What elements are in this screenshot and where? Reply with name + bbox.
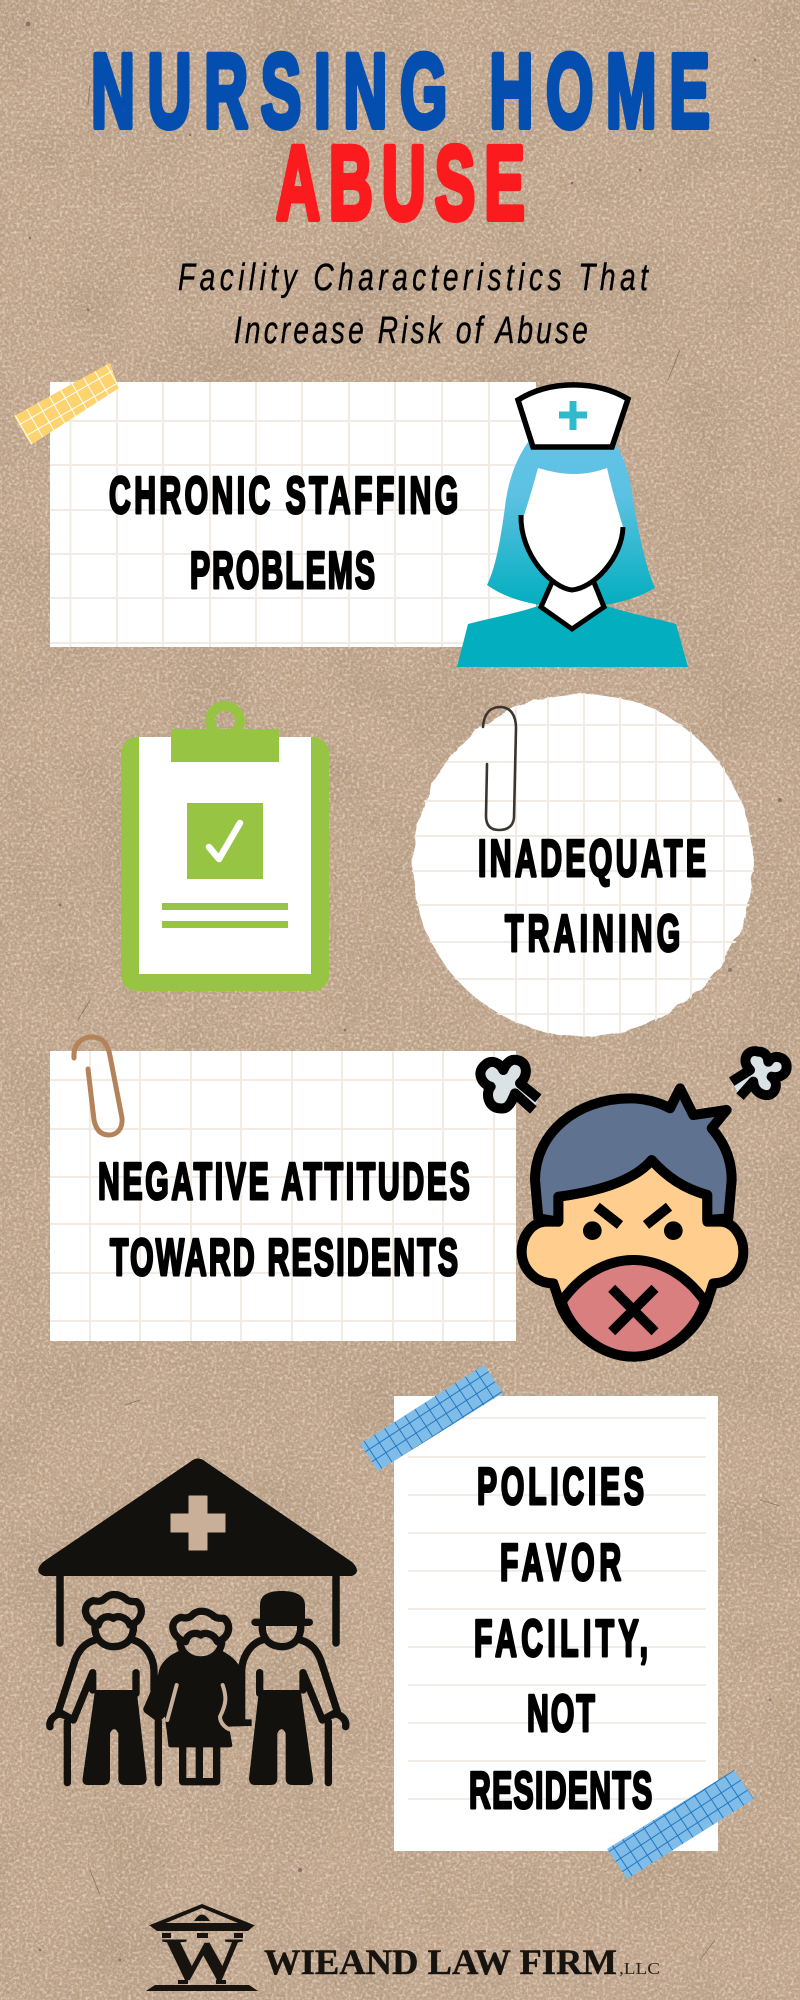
- smoke right: [732, 1051, 787, 1097]
- person left: [50, 1595, 158, 1785]
- heading: negative attitudes toward residents: [98, 1154, 470, 1287]
- heading: policies favor facility, not residents: [469, 1459, 652, 1820]
- panel: chronic staffing problems: [50, 382, 536, 647]
- heading: inadequate training: TRAINING: [505, 906, 680, 963]
- mask: [562, 1260, 705, 1357]
- roof with cross: [38, 1458, 357, 1643]
- panel: inadequate training: [410, 690, 760, 1040]
- heading: policies favor facility, not residents: POLICIES: [477, 1459, 644, 1516]
- heading: policies favor facility, not residents: FAVOR: [500, 1535, 621, 1592]
- icon: nurse: [457, 385, 688, 667]
- subtitle: [178, 257, 649, 352]
- heading: inadequate training: INADEQUATE: [478, 831, 706, 888]
- logo mark: W: [161, 1926, 244, 1992]
- heading: chronic staffing problems: [109, 468, 458, 600]
- tape: yellow: [14, 363, 119, 445]
- tape: blue top: [360, 1365, 503, 1471]
- heading: negative attitudes toward residents: TOWARD RESIDENTS: [110, 1230, 458, 1287]
- heading: inadequate training: [478, 831, 706, 963]
- icon: nursing home residents: [38, 1458, 357, 1785]
- logo: Wieand Law Firm: ,LLC: [619, 1959, 660, 1978]
- heading: negative attitudes toward residents: NEGATIVE ATTITUDES: [98, 1154, 470, 1211]
- tape: blue bottom: [607, 1770, 754, 1879]
- subtitle: Facility Characteristics That: [178, 257, 649, 299]
- heading: policies favor facility, not residents: NOT: [527, 1686, 595, 1743]
- subtitle: Increase Risk of Abuse: [234, 310, 588, 352]
- icon: clipboard: [121, 706, 329, 991]
- heading: chronic staffing problems: CHRONIC STAFFING: [109, 468, 458, 525]
- icon: brown paperclip: [74, 1037, 122, 1135]
- title: ABUSE: [276, 125, 525, 242]
- heading: policies favor facility, not residents: RESIDENTS: [469, 1763, 652, 1820]
- head: [522, 1160, 743, 1357]
- person right: [242, 1591, 346, 1785]
- title: NURSING HOME: [91, 33, 710, 150]
- heading: chronic staffing problems: PROBLEMS: [190, 543, 375, 600]
- person middle: [143, 1611, 252, 1782]
- icon: angry face: [480, 1051, 787, 1357]
- panel: policies favor facility: [394, 1396, 718, 1851]
- title: [91, 33, 710, 242]
- residents group: [50, 1591, 346, 1785]
- panel: negative attitudes toward residents: [50, 1051, 516, 1341]
- logo mark: [146, 1904, 258, 1992]
- icon: dark paperclip: [483, 707, 516, 830]
- heading: policies favor facility, not residents: FACILITY,: [474, 1611, 648, 1668]
- facial features: [583, 1207, 683, 1332]
- logo wordmark: WIEAND LAW FIRM: [264, 1942, 617, 1982]
- hair: [535, 1088, 732, 1222]
- logo: Wieand Law Firm: [146, 1904, 660, 1992]
- smoke left: [480, 1060, 538, 1110]
